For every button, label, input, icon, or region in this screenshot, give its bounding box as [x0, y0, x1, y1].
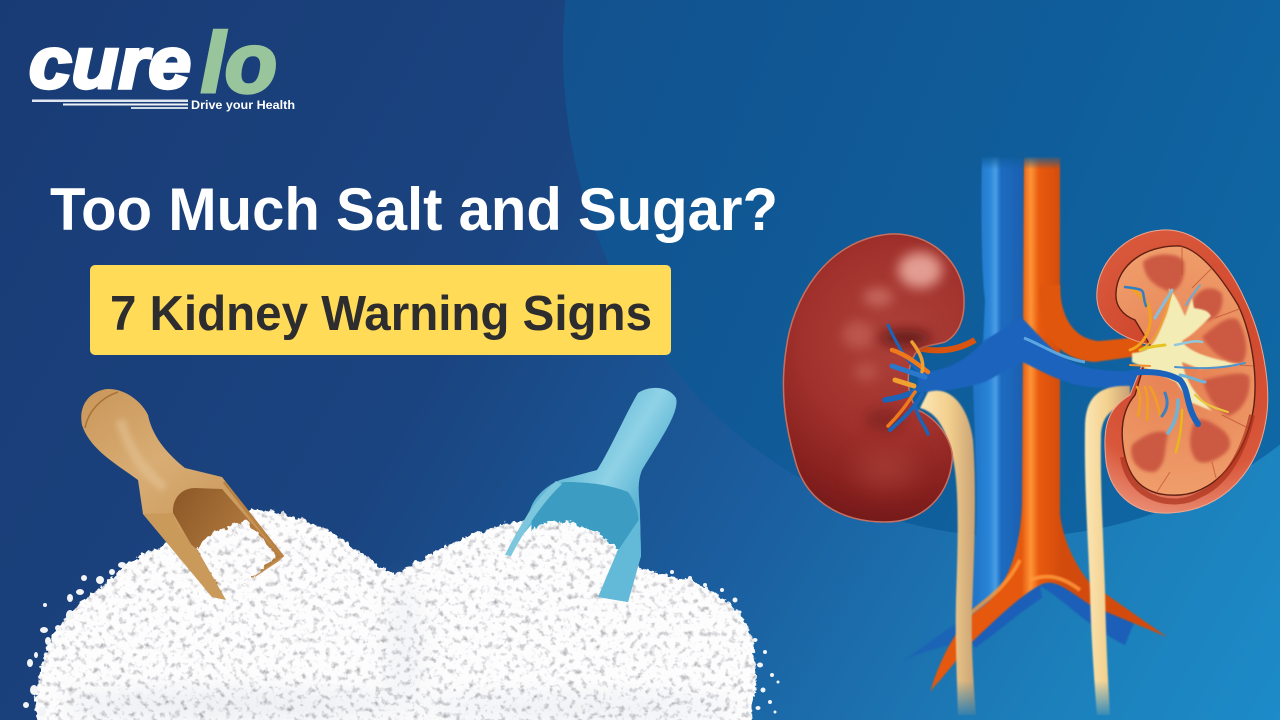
- right ureter: [1085, 386, 1130, 715]
- salt inside wooden scoop: [197, 520, 276, 599]
- logo tagline: Drive your Health: [191, 100, 295, 112]
- wooden scoop: [81, 389, 284, 600]
- aorta: [930, 157, 1167, 692]
- scoop right lip: [224, 482, 283, 557]
- banner: 7 Kidney Warning Signs: 7 Kidney Warning Signs: [110, 287, 652, 341]
- left renal artery: [918, 340, 975, 350]
- aorta branch highlights: [970, 559, 1082, 616]
- logo wordmark: lo: lo: [201, 16, 277, 110]
- logo wordmark: cure: cure: [29, 24, 191, 104]
- left kidney: [783, 234, 964, 522]
- right kidney segment lines: [1155, 246, 1253, 495]
- right kidney: [1097, 230, 1268, 513]
- inferior vena cava: [972, 158, 1023, 611]
- vein highlight: [1024, 338, 1085, 362]
- sugar inside blue scoop: [512, 521, 624, 600]
- left kidney vessels: [885, 325, 932, 434]
- salt and sugar piles: [36, 510, 756, 720]
- renal veins: [918, 318, 1138, 392]
- logo: [29, 16, 295, 112]
- renal artery: [1056, 284, 1145, 363]
- scoop groove: [85, 392, 118, 428]
- background circle: [563, 0, 1280, 537]
- blue scoop: [505, 388, 677, 602]
- scoop interior: [173, 488, 281, 598]
- loose salt grains: [23, 562, 780, 717]
- banner: 7 Kidney Warning Signs: [90, 265, 671, 355]
- right kidney renal pelvis: [1132, 288, 1246, 411]
- lower blue veins: [905, 580, 1135, 660]
- blue scoop bowl interior: [530, 482, 639, 570]
- left ureter: [920, 391, 976, 715]
- illustration: kidneys and blood vessels: [783, 157, 1268, 715]
- title: Too Much Salt and Sugar?: [50, 176, 778, 243]
- right kidney cortex: [1116, 246, 1255, 495]
- central vessels and ureters: [905, 157, 1182, 715]
- right kidney pyramids: [1131, 254, 1250, 472]
- blue scoop left lip: [505, 481, 562, 556]
- blue scoop right wall: [598, 518, 641, 602]
- blue scoop handle: [505, 388, 677, 602]
- right kidney inner vessels: [1125, 285, 1245, 452]
- scoop front wall: [143, 513, 226, 600]
